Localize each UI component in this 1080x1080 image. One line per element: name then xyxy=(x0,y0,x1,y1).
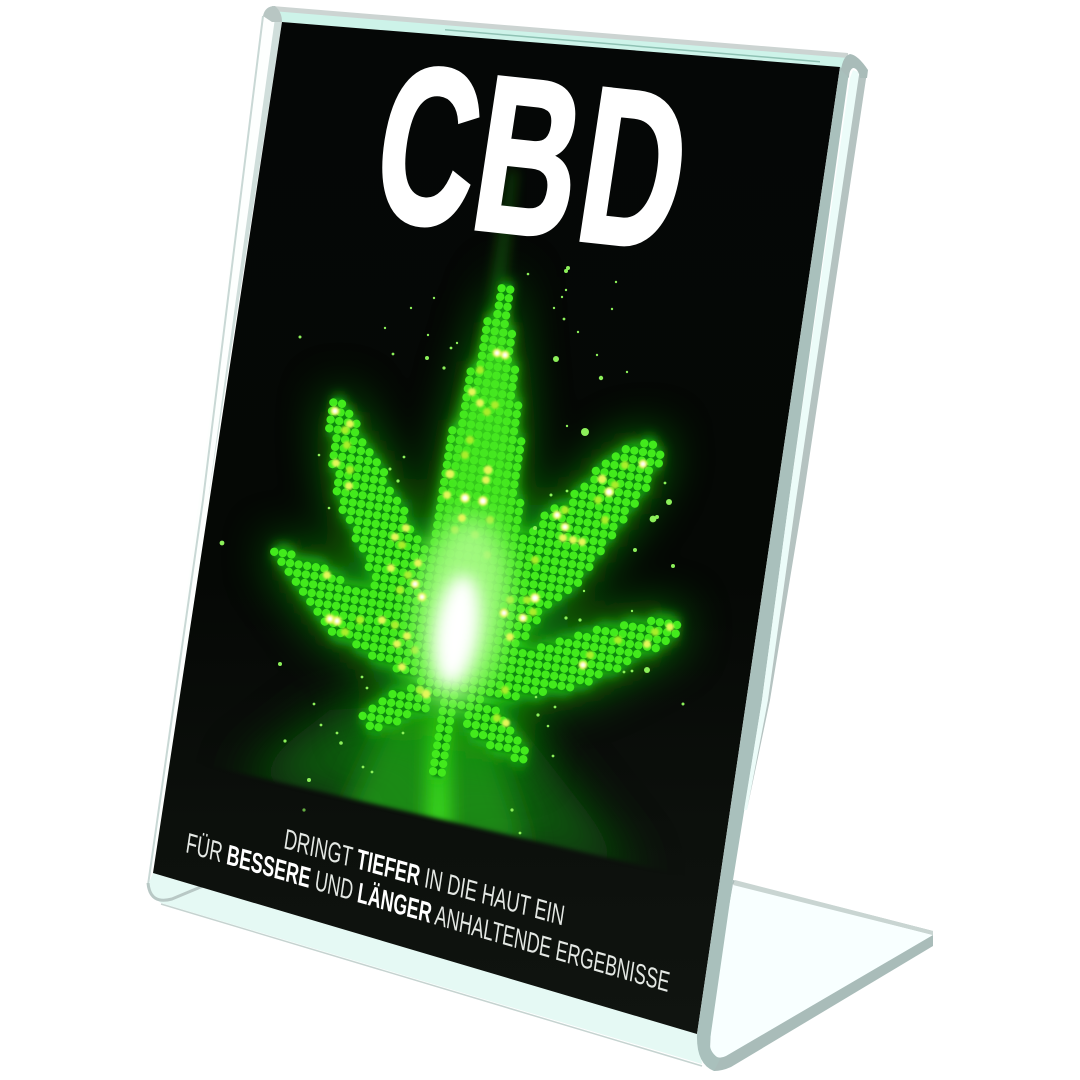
central leaf brightening xyxy=(425,300,514,680)
tagline line 1: DRINGT TIEFER IN DIE HAUT EIN xyxy=(282,824,567,932)
yellow-green dot accents xyxy=(341,366,659,722)
base plate xyxy=(705,880,933,1071)
light beam under leaf xyxy=(240,700,640,880)
poster background xyxy=(153,22,840,1034)
leaf outer glow xyxy=(248,268,706,779)
title: CBD: C xyxy=(362,17,496,274)
sparkle particles xyxy=(220,266,684,834)
bright highlight dots xyxy=(323,348,674,727)
top-left corner nub xyxy=(263,6,282,22)
bottom left curl xyxy=(148,883,203,900)
title: CBD: BD xyxy=(459,28,703,297)
acrylic frame back and bands xyxy=(148,6,848,1066)
top curl xyxy=(841,54,868,78)
leaf dots xyxy=(270,284,682,777)
bottom band xyxy=(148,873,702,1064)
inner grey strip with bottom bend xyxy=(697,67,849,1071)
poster artwork xyxy=(220,170,726,880)
upper ray xyxy=(478,167,522,352)
title: CBD xyxy=(362,17,703,297)
leaf under fill xyxy=(273,282,679,778)
tagline line 2: FÜR BESSERE UND LÄNGER ANHALTENDE ERGEBNISSE xyxy=(184,827,672,999)
leaf near glow xyxy=(265,273,687,773)
right frame edge xyxy=(697,54,868,1071)
white highlight cores xyxy=(328,350,646,668)
illustration: acrylic sign holder with CBD poster xyxy=(146,6,933,1071)
white centre strip xyxy=(744,70,859,810)
left strip xyxy=(148,16,281,885)
central flare xyxy=(405,510,519,710)
top band xyxy=(272,7,848,69)
outer grey strip xyxy=(747,72,867,810)
